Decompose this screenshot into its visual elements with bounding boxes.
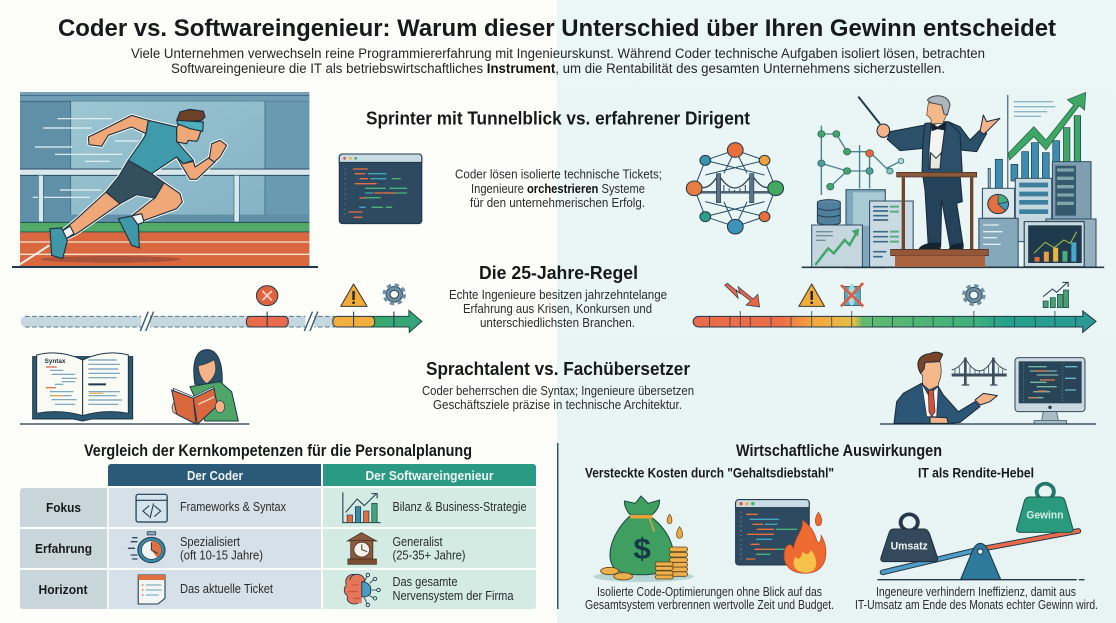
caption: leverage: Ingeneure verhindern Ineffizienz, damit aus [876, 585, 1076, 599]
businessman [894, 352, 997, 423]
illustration: data systems behind conductor [802, 92, 1104, 268]
illustration: woman reading book [20, 350, 249, 424]
icon: balance growth chart [343, 492, 381, 523]
podium posts [903, 177, 972, 250]
title: Coder vs. Softwareingenieur: Warum dieser Unterschied über Ihren Gewinn entscheidet [58, 15, 1056, 42]
text: coder vs orchestration: Coder lösen isolierte technische Tickets; [455, 168, 662, 182]
row: Fokus: Frameworks & Syntax [180, 500, 287, 514]
icon: brain network [344, 573, 380, 607]
illustration: syntax book: Syntax [45, 358, 66, 365]
timeline: short coder experience [21, 284, 422, 332]
caption: hidden costs [585, 585, 834, 612]
podium top and base [897, 172, 977, 177]
subtitle text: Viele Unternehmen verwechseln reine Programmiererfahrung mit Ingenieurskunst. Während Coder technische Aufgaben isoliert lösen, betrachten [131, 46, 985, 61]
text: 25 years rule: unterschiedlichsten Branchen. [480, 316, 635, 330]
subheading: IT leverage: IT als Rendite-Hebel [918, 466, 1034, 480]
heading: competency comparison: Vergleich der Kernkompetenzen für die Personalplanung [84, 442, 472, 460]
icon: money bag with coins [593, 496, 693, 582]
ground line under sprinter [12, 266, 318, 268]
row: Fokus [20, 488, 536, 527]
text: language talent: Geschäftsziele präzise in technische Architektur. [433, 398, 682, 412]
left buildings [846, 190, 885, 268]
monitor [1015, 358, 1085, 412]
divider [557, 443, 558, 609]
subheading: hidden costs: Versteckte Kosten durch "Gehaltsdiebstahl" [585, 466, 834, 480]
graph network [821, 126, 901, 195]
icon: code window [339, 154, 422, 224]
text: coder vs orchestration [455, 168, 662, 210]
row: Erfahrung: (oft 10-15 Jahre) [180, 548, 263, 562]
icon: lever with Umsatz and Gewinn weights [877, 484, 1085, 580]
row: Horizont: Das gesamte [392, 575, 458, 589]
text: coder vs orchestration: Ingenieure orchestrieren Systeme [471, 182, 645, 196]
table: core competencies [20, 464, 536, 609]
text: language talent [422, 384, 694, 412]
icon: lever with Umsatz and Gewinn weights: Gewinn [1026, 510, 1064, 522]
illustration: syntax book [33, 353, 133, 421]
row: Erfahrung: Generalist [392, 535, 443, 549]
icon: stopwatch [128, 532, 165, 563]
row: Horizont [20, 570, 536, 609]
subtitle text: Softwareingenieure die IT als betriebswirtschaftliches Instrument, um die Rentabilität des gesamten Unternehmens sicherzustellen. [171, 61, 945, 76]
icon: pendulum clock [347, 533, 377, 564]
table icons [128, 492, 381, 607]
heading: economic effects: Wirtschaftliche Auswirkungen [736, 442, 942, 460]
illustration: conductor on podium [858, 96, 1000, 267]
caption: hidden costs: Isolierte Code-Optimierungen ohne Blick auf das [597, 585, 822, 599]
icon: lever with Umsatz and Gewinn weights: Umsatz [891, 541, 928, 552]
row: Erfahrung: Erfahrung [35, 541, 92, 556]
header: Der Coder: Der Coder [187, 468, 243, 483]
timeline: engineer experience [693, 282, 1096, 332]
header: Der Softwareingenieur [323, 464, 536, 486]
row: Horizont: Horizont [38, 582, 88, 597]
header: Der Coder [108, 464, 321, 486]
head [927, 103, 947, 124]
icon: burning code window [736, 500, 826, 573]
bridge [952, 358, 1007, 385]
trousers [923, 175, 963, 247]
jacket and arms [877, 115, 1000, 173]
right bars [1006, 95, 1009, 267]
caption: hidden costs: Gesamtsystem verbrennen wertvolle Zeit und Budget. [585, 598, 834, 612]
caption: leverage [855, 585, 1098, 612]
header: Der Softwareingenieur: Der Softwareingenieur [366, 468, 494, 483]
row: Horizont: Das aktuelle Ticket [180, 582, 273, 596]
icon: ticket list [138, 575, 165, 604]
illustration: translator businessman with bridge and monitor [880, 352, 1096, 424]
text: coder vs orchestration: für den unternehmerischen Erfolg. [470, 196, 645, 210]
icon: code brackets window [136, 494, 167, 522]
text: 25 years rule: Echte Ingenieure besitzen jahrzehntelange [449, 288, 667, 302]
server racks [1052, 162, 1091, 220]
icon: network with bridge [686, 143, 783, 234]
row: Erfahrung [20, 529, 536, 568]
heading: Sprachtalent: Sprachtalent vs. Fachübersetzer [426, 358, 690, 379]
row: Fokus: Bilanz & Business-Strategie [392, 500, 527, 514]
runner figure [61, 115, 227, 239]
heading: Sprinter mit Tunnelblick: Sprinter mit Tunnelblick vs. erfahrener Dirigent [366, 108, 750, 128]
text: 25 years rule [449, 288, 667, 330]
heading: Die 25-Jahre-Regel: Die 25-Jahre-Regel [479, 262, 638, 283]
row: Erfahrung: Spezialisiert [180, 535, 240, 549]
row: Horizont: Nervensystem der Firma [392, 589, 514, 603]
row: Erfahrung: (25-35+ Jahre) [392, 548, 466, 562]
row: Fokus: Fokus [46, 500, 81, 515]
subtitle text [131, 46, 985, 76]
text: language talent: Coder beherrschen die Syntax; Ingenieure übersetzen [422, 384, 694, 398]
text: 25 years rule: Erfahrung aus Krisen, Konkursen und [463, 302, 652, 316]
illustration: blindfolded sprinter on track [20, 92, 309, 267]
icon: money bag with coins: $ [633, 533, 651, 566]
